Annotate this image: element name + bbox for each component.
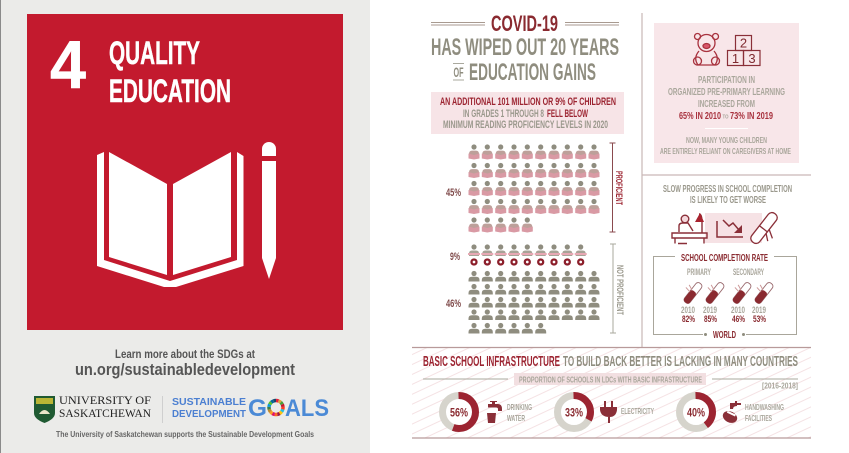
panel: basic school infrastructure xyxy=(412,347,811,438)
icon: pencil xyxy=(262,142,276,279)
heading: school completion rate: SCHOOL COMPLETION RATE xyxy=(681,252,768,264)
donut: handwashing 40% xyxy=(680,396,712,428)
donut: electricity 33%: 33% xyxy=(565,406,583,420)
label: handwashing facilities: FACILITIES xyxy=(745,413,772,423)
heading: COVID-19: HAS WIPED OUT 20 YEARS xyxy=(431,34,619,61)
heading: COVID-19 xyxy=(431,11,619,86)
text: reliance on caregivers xyxy=(660,135,791,156)
label: primary: PRIMARY xyxy=(687,267,711,277)
panel: SDG 4 red square xyxy=(27,14,343,330)
icon: number blocks xyxy=(728,36,760,66)
callout: 101 million children: FELL BELOW xyxy=(547,108,588,120)
label: handwashing facilities: HANDWASHING xyxy=(745,402,784,412)
text: participation: INCREASED FROM xyxy=(698,98,755,110)
values: completion rates: 46% xyxy=(732,314,745,324)
values: completion rates: 2019 xyxy=(703,305,717,315)
icon: number blocks: 3 xyxy=(748,51,756,66)
icon: open book xyxy=(97,152,244,287)
callout: 101 million children: IN GRADES 1 THROUGH 8 xyxy=(463,108,544,120)
subheading: proportion: PROPORTION OF SCHOOLS IN LDCs WITH BASIC INFRASTRUCTURE xyxy=(519,374,702,384)
icon: tap and glass xyxy=(487,401,502,423)
text: slow progress xyxy=(663,183,792,206)
icon: number blocks: 1 xyxy=(732,51,739,66)
donut: electricity 33% xyxy=(558,396,590,428)
logo: Sustainable Development Goals: SUSTAINABLE xyxy=(172,397,246,408)
heading: infrastructure xyxy=(423,354,798,370)
logo: University of Saskatchewan: SASKATCHEWAN xyxy=(59,406,151,420)
logo: Sustainable Development Goals: G xyxy=(248,395,267,422)
subheading: proportion xyxy=(423,373,798,385)
logo: University of Saskatchewan: UNIVERSITY OF xyxy=(59,393,151,407)
icons: diplomas xyxy=(679,278,774,305)
goal number: 4 xyxy=(50,27,86,103)
goal title: QUALITY xyxy=(109,35,200,71)
label: drinking water xyxy=(507,402,532,423)
values: completion rates: 53% xyxy=(753,314,766,324)
heading: COVID-19: COVID-19 xyxy=(491,11,558,36)
donut: drinking water 56% xyxy=(442,396,476,428)
bracket: proficient xyxy=(610,143,624,232)
label: electricity: ELECTRICITY xyxy=(621,406,654,416)
values: completion rates: 2010 xyxy=(681,305,695,315)
heading: COVID-19: EDUCATION GAINS xyxy=(469,59,596,86)
icon: handwashing xyxy=(721,401,741,425)
icon: number blocks: 2 xyxy=(740,36,747,50)
goal title xyxy=(109,35,231,109)
chart: proficient people 45% xyxy=(468,144,600,232)
text: participation: 73% IN 2019 xyxy=(730,110,773,122)
band: school completion icons xyxy=(672,211,785,250)
values: completion rates xyxy=(681,305,766,324)
label: years: [2016-2018] xyxy=(762,380,798,390)
label: 45%: 45% xyxy=(446,187,461,199)
label: 9%: 9% xyxy=(450,251,460,263)
icon: SDG wheel xyxy=(269,400,283,414)
icon: declining chart xyxy=(717,220,743,237)
donut: drinking water 56%: 56% xyxy=(450,406,468,420)
values: completion rates: 82% xyxy=(682,314,695,324)
bracket: not proficient xyxy=(610,244,625,333)
chart: not proficient people 46% xyxy=(468,271,600,334)
text: support statement: The University of Saskatchewan supports the Sustainable Development Goals xyxy=(56,429,314,439)
heading: infrastructure: BASIC SCHOOL INFRASTRUCTURE xyxy=(423,354,560,370)
callout: 101 million children xyxy=(431,92,624,134)
label: secondary: SECONDARY xyxy=(733,267,764,277)
label: world: WORLD xyxy=(713,329,736,341)
text: slow progress: IS LIKELY TO GET WORSE xyxy=(690,194,766,206)
icon: teddy bear xyxy=(694,34,720,65)
label: drinking water: WATER xyxy=(507,413,525,423)
text: participation: TO xyxy=(722,114,729,120)
callout: 101 million children: MINIMUM READING PROFICIENCY LEVELS IN 2020 xyxy=(443,119,608,131)
heading: COVID-19: OF xyxy=(454,64,464,80)
panel: school completion rate xyxy=(654,252,796,341)
icon: diploma xyxy=(749,211,785,250)
text: learn more: un.org/sustainabledevelopment xyxy=(75,360,295,379)
text: participation xyxy=(668,74,785,122)
goal title: EDUCATION xyxy=(109,73,231,109)
values: completion rates: 85% xyxy=(704,314,717,324)
text: learn more xyxy=(75,349,295,379)
text: participation: 65% IN 2010 xyxy=(679,110,721,122)
logo: Sustainable Development Goals: DEVELOPMENT xyxy=(172,409,246,420)
icon: plug xyxy=(600,401,617,423)
label: 46%: 46% xyxy=(446,298,461,310)
text: reliance on caregivers: NOW, MANY YOUNG CHILDREN xyxy=(686,135,767,145)
label: drinking water: DRINKING xyxy=(507,402,532,412)
icon: student at desk xyxy=(672,213,707,244)
callout: 101 million children: AN ADDITIONAL 101 MILLION OR 9% OF CHILDREN xyxy=(440,96,616,108)
text: learn more: Learn more about the SDGs at xyxy=(115,349,255,361)
chart: newly not proficient people 9% xyxy=(468,244,587,264)
logo: University of Saskatchewan xyxy=(34,393,151,423)
logo: Sustainable Development Goals xyxy=(172,395,329,422)
values: completion rates: 2019 xyxy=(752,305,766,315)
bracket: not proficient: NOT PROFICIENT xyxy=(614,265,625,315)
panel: left background xyxy=(0,0,370,453)
bracket: proficient: PROFICIENT xyxy=(613,171,624,205)
values: completion rates: 2010 xyxy=(731,305,745,315)
label: handwashing facilities xyxy=(745,402,784,423)
text: participation: PARTICIPATION IN xyxy=(698,74,755,86)
panel: pre-primary learning xyxy=(654,23,799,163)
donut: handwashing 40%: 40% xyxy=(687,406,705,420)
logo: Sustainable Development Goals: ALS xyxy=(285,395,329,422)
